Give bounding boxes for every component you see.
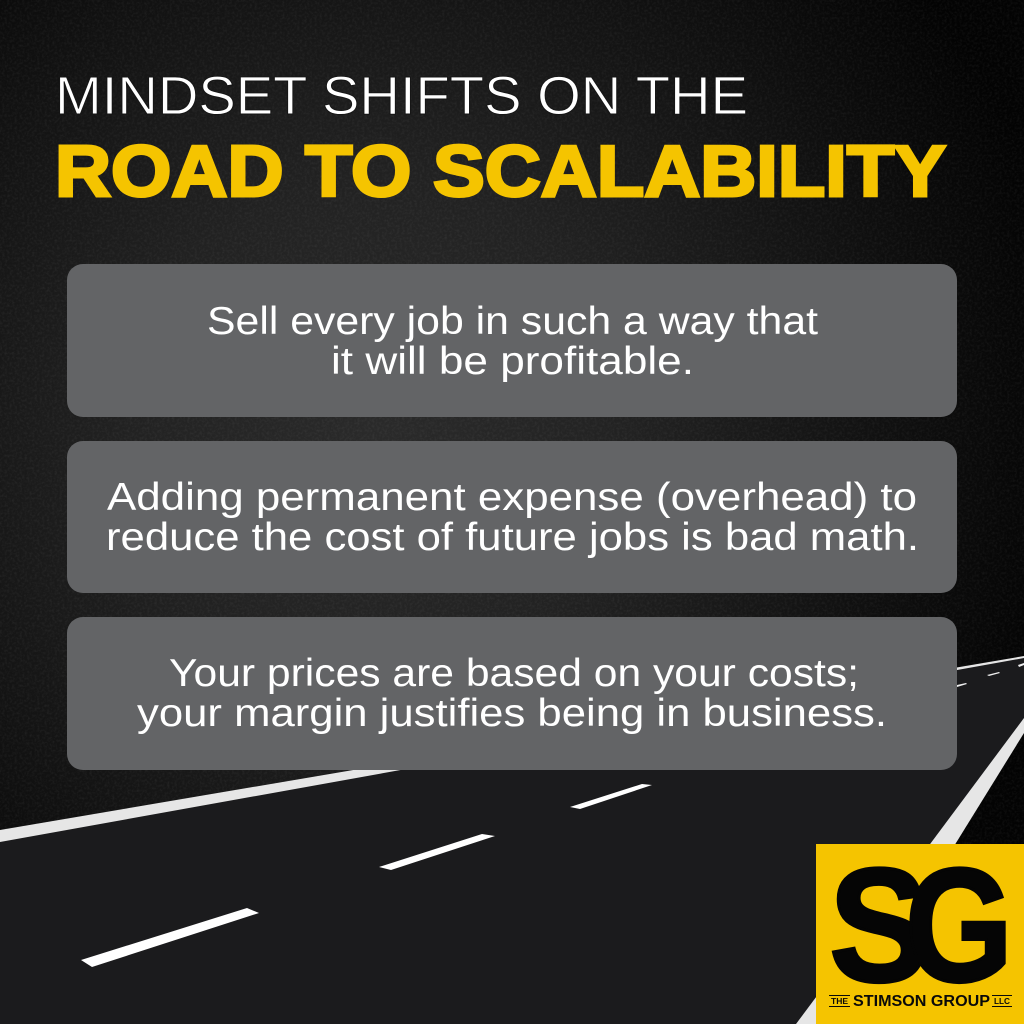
panel: sell profitably <box>67 264 957 417</box>
road surface <box>0 657 1024 1024</box>
far lane dash <box>570 784 652 809</box>
panel: prices and margin: Your prices are based on your costs; <box>169 652 859 695</box>
logo wordmark: STIMSON GROUP <box>853 993 990 1010</box>
panel: overhead <box>67 441 957 593</box>
title line 2: ROAD TO SCALABILITY <box>55 132 946 212</box>
logo monogram: S <box>829 835 929 1016</box>
panel: sell profitably: Sell every job in such a way that <box>207 300 818 343</box>
logo monogram <box>829 835 1013 1016</box>
road left edge line <box>0 656 1024 842</box>
logo wordmark: LLC <box>994 997 1010 1006</box>
panel: sell profitably: it will be profitable. <box>331 340 694 383</box>
near lane dash <box>81 908 259 967</box>
distant lane dashes <box>957 663 1024 687</box>
title <box>55 66 946 212</box>
panel: prices and margin <box>67 617 957 770</box>
road illustration <box>0 656 1024 1024</box>
panel: overhead: Adding permanent expense (overhead) to <box>107 476 917 519</box>
title line 1: MINDSET SHIFTS ON THE <box>55 66 748 126</box>
middle lane dash <box>379 834 495 870</box>
road right edge line <box>796 718 1024 1024</box>
logo wordmark: THE <box>831 997 849 1006</box>
logo: The Stimson Group <box>816 835 1024 1024</box>
panel: prices and margin: your margin justifies being in business. <box>137 692 887 735</box>
panel: overhead: reduce the cost of future jobs is bad math. <box>106 516 919 559</box>
